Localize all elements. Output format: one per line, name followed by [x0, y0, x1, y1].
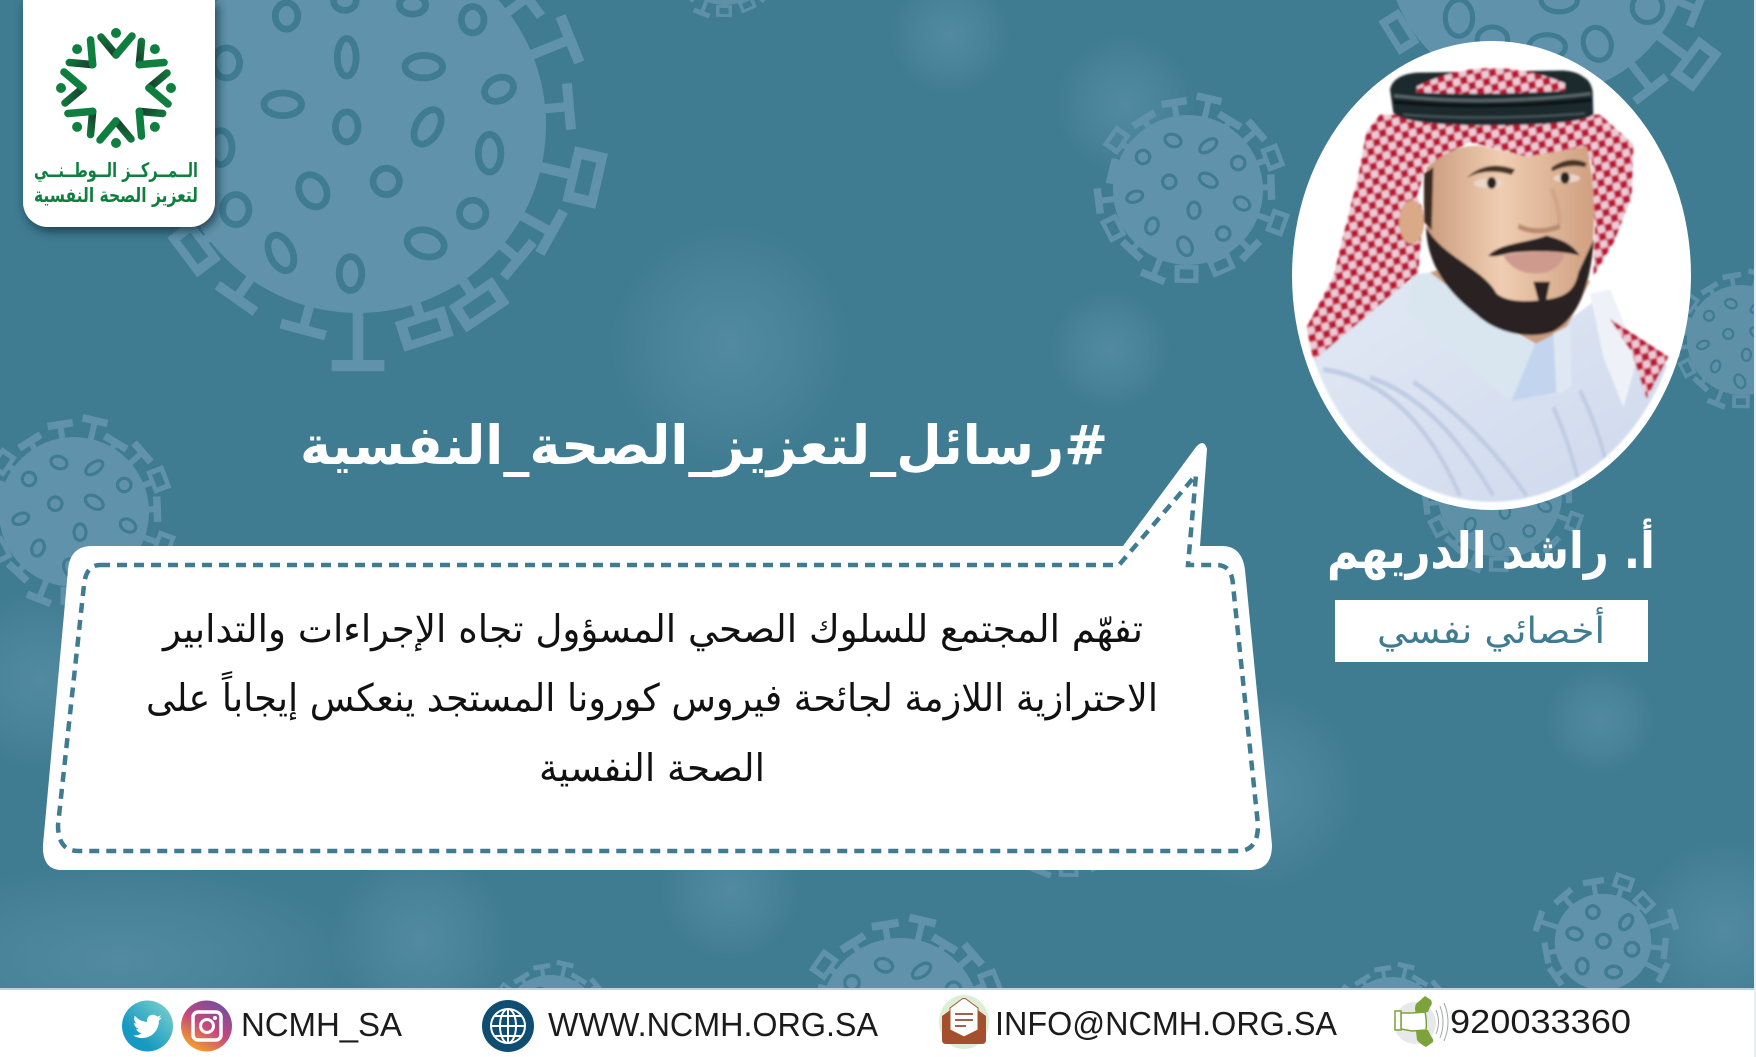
virus: bottom centre [809, 914, 1002, 988]
photo portrait [1290, 41, 1691, 525]
virus: top right [1378, 0, 1722, 104]
phone number: 920033360 [1450, 1003, 1631, 1040]
heading hashtag: #رسائل_لتعزيز_الصحة_النفسية [300, 414, 1108, 477]
name: أ. راشد الدريهم [1327, 518, 1655, 581]
lips [1503, 252, 1565, 273]
footer bar [0, 988, 1756, 1057]
panel background [23, 0, 215, 227]
collar [1410, 272, 1474, 313]
website: WWW.NCMH.ORG.SA [548, 1006, 878, 1043]
chin patch [1533, 282, 1550, 306]
virus: behind bubble [992, 719, 1154, 879]
virus: bottom small left [499, 960, 602, 988]
moustache [1488, 235, 1580, 256]
headdress [1307, 115, 1633, 361]
logo text: لتعزيز الصحة النفسية [34, 183, 198, 207]
shirt [1310, 280, 1668, 503]
virus: large top left [168, 0, 608, 372]
right shoulder stripe [1590, 289, 1637, 407]
virus: middle right [1093, 92, 1290, 285]
icon: globe [482, 1000, 534, 1052]
footer background [0, 989, 1756, 1057]
head band [1390, 71, 1593, 125]
logo panel [23, 0, 215, 227]
virus: left [0, 414, 176, 607]
logo text: الــمــركــز الــوطــنــي [34, 158, 198, 183]
beard [1426, 226, 1594, 335]
logo text [34, 158, 198, 207]
bubble text [146, 607, 1158, 790]
bubble body [43, 443, 1272, 870]
ear and temple hair [1399, 200, 1424, 244]
neck [1430, 268, 1591, 345]
virus: right edge [1677, 268, 1754, 410]
icon: email [939, 995, 989, 1049]
eyes and brows [1467, 166, 1515, 178]
icon: telephone [1394, 996, 1448, 1047]
bubble text: الصحة النفسية [539, 746, 765, 790]
virus: behind name [1422, 414, 1584, 574]
job title badge: أخصائي نفسي [1377, 607, 1605, 652]
virus: bottom small right [1341, 962, 1442, 988]
icon: instagram [181, 1000, 232, 1052]
speech bubble [43, 443, 1272, 870]
virus: top edge fragment [689, 0, 766, 18]
person [1306, 66, 1670, 503]
headdress crown [1417, 68, 1565, 94]
dashed outline [58, 475, 1258, 851]
bubble text: تفهّم المجتمع للسلوك الصحي المسؤول تجاه الإجراءات والتدابير [161, 607, 1143, 652]
icon: logo mark [56, 28, 176, 148]
email address: INFO@NCMH.ORG.SA [995, 1005, 1337, 1042]
nose [1518, 226, 1560, 231]
social handle: NCMH_SA [241, 1006, 402, 1043]
photo frame [1292, 41, 1691, 510]
virus: bottom right [1532, 872, 1680, 988]
right edge strip [1754, 0, 1756, 1057]
face [1424, 144, 1596, 303]
bubble text: الاحترازية اللازمة لجائحة فيروس كورونا المستجد ينعكس إيجاباً على [146, 671, 1158, 721]
job title badge [1335, 600, 1648, 662]
icon: twitter [122, 1000, 173, 1052]
